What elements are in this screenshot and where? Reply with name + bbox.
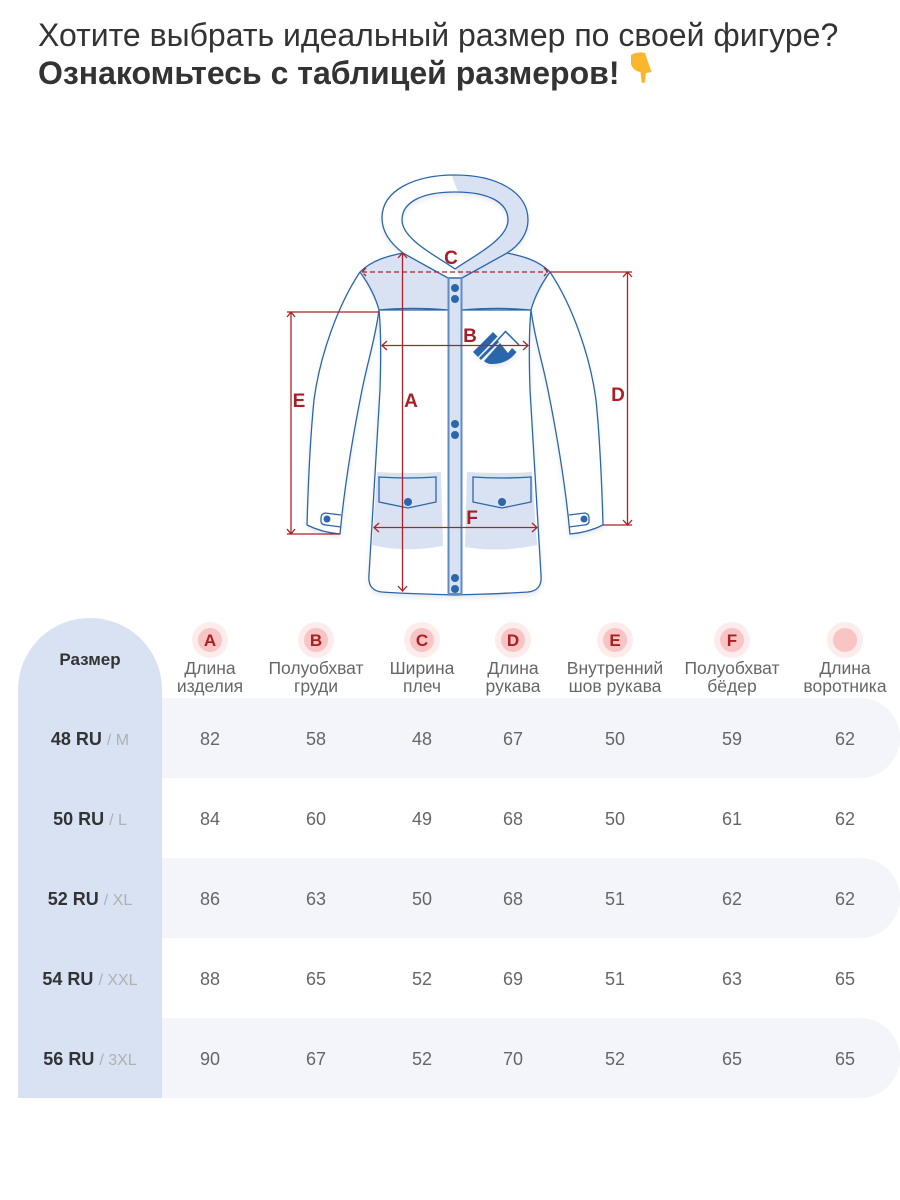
column header B: груди [294, 676, 338, 696]
column header C: C [416, 631, 428, 650]
column header F: бёдер [707, 676, 757, 696]
column header E [567, 622, 663, 696]
column header E: E [609, 631, 621, 650]
column header A: изделия [177, 676, 243, 696]
column header D: рукава [486, 676, 541, 696]
row 54: 51 [605, 969, 625, 989]
row 50: 84 [200, 809, 220, 829]
column header F: Полуобхват [684, 658, 780, 678]
row 54: 52 [412, 969, 432, 989]
column header D: Длина [487, 658, 539, 678]
row 54: 69 [503, 969, 523, 989]
hood [382, 175, 528, 278]
measure letters: B [463, 326, 477, 347]
row 50: 50 [605, 809, 625, 829]
column header collar: Длина [819, 658, 871, 678]
row 48 [51, 729, 855, 749]
row 56: 65 [722, 1049, 742, 1069]
title [38, 17, 838, 91]
row 48: 48 RU / M [51, 729, 129, 749]
column header C [390, 622, 455, 696]
column header A [177, 622, 243, 696]
row 48: 59 [722, 729, 742, 749]
row 56: 52 [605, 1049, 625, 1069]
row 52: 86 [200, 889, 220, 909]
column header A: A [204, 631, 216, 650]
row 54: 65 [835, 969, 855, 989]
icon: logo [473, 332, 519, 364]
column header C: плеч [403, 676, 441, 696]
row 52: 62 [835, 889, 855, 909]
row 56: 65 [835, 1049, 855, 1069]
measure letters [293, 248, 625, 529]
yoke [360, 253, 448, 310]
row 54: 54 RU / XXL [42, 969, 138, 989]
column header A: Длина [184, 658, 236, 678]
row 54: 63 [722, 969, 742, 989]
title: Хотите выбрать идеальный размер по своей фигуре? [38, 17, 838, 53]
row 52: 63 [306, 889, 326, 909]
column header C: Ширина [390, 658, 455, 678]
measure letters: E [293, 391, 305, 412]
row 48: 62 [835, 729, 855, 749]
jacket outline [307, 175, 603, 595]
row 48: 67 [503, 729, 523, 749]
row 52: 52 RU / XL [48, 889, 132, 909]
column header E: шов рукава [569, 676, 662, 696]
row 48: 48 [412, 729, 432, 749]
row 50: 61 [722, 809, 742, 829]
column header collar [803, 622, 887, 696]
row 54 [42, 969, 855, 989]
row 56: 67 [306, 1049, 326, 1069]
table striped rows [162, 698, 900, 1098]
column header collar: воротника [803, 676, 887, 696]
column header F: F [727, 631, 737, 650]
measure lines [287, 253, 632, 591]
size column [18, 618, 162, 1098]
row 50 [53, 809, 855, 829]
row 50: 62 [835, 809, 855, 829]
row 48: 50 [605, 729, 625, 749]
row 50: 50 RU / L [53, 809, 127, 829]
jacket diagram [287, 175, 632, 595]
row 52: 50 [412, 889, 432, 909]
row 48: 82 [200, 729, 220, 749]
row 52: 62 [722, 889, 742, 909]
row 56: 56 RU / 3XL [43, 1049, 137, 1069]
column header B: Полуобхват [268, 658, 364, 678]
title: Ознакомьтесь с таблицей размеров! [38, 55, 619, 91]
measure letters: A [404, 391, 418, 412]
row 56: 52 [412, 1049, 432, 1069]
size table [18, 618, 900, 1098]
row 52 [48, 889, 855, 909]
measure letters: C [444, 248, 458, 269]
row 52: 68 [503, 889, 523, 909]
cuffs [321, 513, 589, 527]
row 56: 70 [503, 1049, 523, 1069]
placket [448, 278, 462, 594]
row 50: 68 [503, 809, 523, 829]
measure letters: D [611, 385, 625, 406]
icon: pointing down hand [631, 52, 652, 83]
row 56: 90 [200, 1049, 220, 1069]
row 52: 51 [605, 889, 625, 909]
column header F [684, 622, 780, 696]
buttons [451, 284, 459, 593]
column header E: Внутренний [567, 658, 663, 678]
column header D [486, 622, 541, 696]
column header B [268, 622, 364, 696]
row 54: 65 [306, 969, 326, 989]
row 50: 49 [412, 809, 432, 829]
column header D: D [507, 631, 519, 650]
row 56 [43, 1049, 855, 1069]
row 50: 60 [306, 809, 326, 829]
size column heading: Размер [59, 650, 121, 669]
row 48: 58 [306, 729, 326, 749]
measure letters: F [466, 508, 478, 529]
column header B: B [310, 631, 322, 650]
pockets [372, 472, 537, 550]
row 54: 88 [200, 969, 220, 989]
